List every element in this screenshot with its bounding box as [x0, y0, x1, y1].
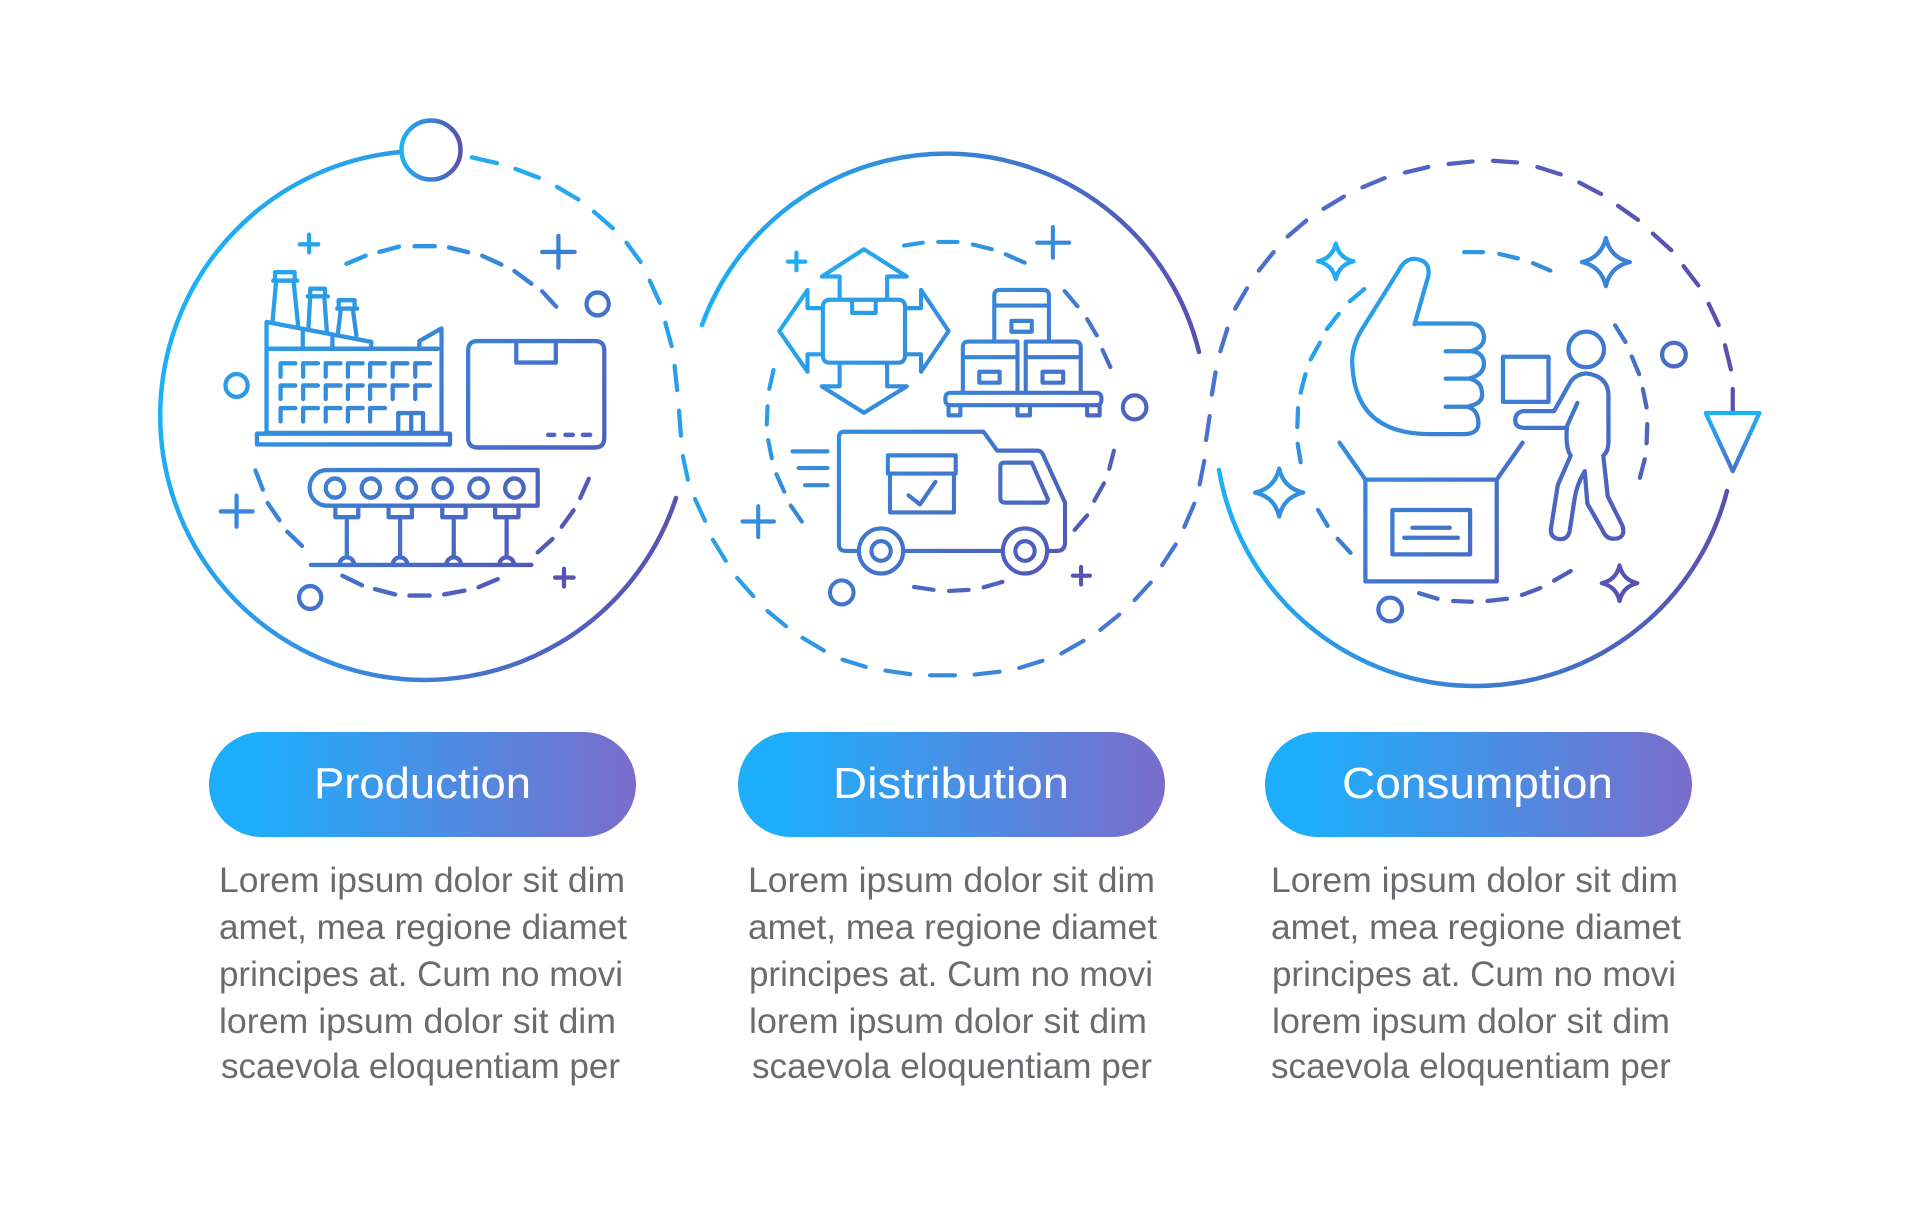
- pill heading: Production: [209, 732, 636, 837]
- start marker circle: [402, 120, 460, 180]
- pill heading: Distribution: [738, 732, 1165, 837]
- icon: thumbs up, open box and customer: [1212, 161, 1759, 621]
- pill heading: Distribution: Distribution: [833, 759, 1069, 808]
- text block: consumption description: scaevola eloquentiam per: [1271, 1047, 1671, 1086]
- icon: distribution box, pallet and van: [683, 227, 1210, 675]
- arrow head: [1706, 413, 1759, 471]
- text block: distribution description: lorem ipsum dolor sit dim: [749, 1002, 1147, 1041]
- conveyor rollers: [326, 478, 524, 498]
- inner dashed ring: consumption: [1297, 252, 1647, 602]
- text block: consumption description: Lorem ipsum dolor sit dim: [1271, 861, 1678, 900]
- decorative sparkles and dots: [1255, 238, 1686, 621]
- icon: factory: [257, 272, 450, 444]
- pill heading: Consumption: Consumption: [1342, 759, 1613, 808]
- panel: distribution circle: [683, 154, 1210, 675]
- text block: distribution description: amet, mea regione diamet: [748, 908, 1157, 947]
- inner dashed ring: distribution: [767, 242, 1114, 591]
- van wheels: [859, 528, 1047, 574]
- text block: distribution description: principes at. Cum no movi: [749, 955, 1153, 994]
- icon: person carrying box: [1503, 332, 1623, 539]
- icon: factory, box and conveyor: [221, 157, 681, 609]
- icon: cardboard box: [468, 341, 604, 447]
- icon: thumbs up: [1352, 259, 1484, 434]
- column: consumption label and text: [1265, 732, 1692, 1086]
- decorative plus signs and dots: [742, 227, 1146, 604]
- text block: consumption description: principes at. Cum no movi: [1272, 955, 1676, 994]
- pill heading: Consumption: [1265, 732, 1692, 837]
- text block: consumption description: [1271, 861, 1681, 1086]
- text block: production description: scaevola eloquentiam per: [221, 1047, 620, 1086]
- solid ring: consumption: [1219, 470, 1727, 686]
- outer dashed arc: production: [472, 157, 681, 436]
- text block: consumption description: lorem ipsum dolor sit dim: [1272, 1002, 1670, 1041]
- icon: boxes on pallet: [945, 290, 1101, 415]
- text block: production description: Lorem ipsum dolor sit dim: [219, 861, 625, 900]
- text block: production description: principes at. Cum no movi: [219, 955, 623, 994]
- outer dashed arc with arrow stem: [1212, 161, 1733, 411]
- panel: production circle: [160, 120, 681, 680]
- text block: production description: lorem ipsum dolor sit dim: [219, 1002, 616, 1041]
- icon: box with four arrows: [779, 249, 949, 413]
- text block: production description: amet, mea regione diamet: [219, 908, 627, 947]
- decorative plus signs and dots: [221, 235, 609, 609]
- solid ring: production: [160, 152, 676, 680]
- icon: delivery van: [792, 432, 1065, 551]
- icon: open box: [1339, 443, 1523, 581]
- text block: distribution description: [748, 861, 1157, 1086]
- column: production label and text: [209, 732, 636, 1086]
- pill heading: Production: Production: [314, 759, 531, 808]
- outer dashed arc: distribution: [683, 416, 1210, 675]
- solid ring: distribution: [702, 154, 1199, 352]
- text block: consumption description: amet, mea regione diamet: [1271, 908, 1681, 947]
- icon: conveyor belt: [310, 470, 538, 565]
- panel: consumption circle: [1212, 161, 1759, 686]
- text block: distribution description: scaevola eloquentiam per: [752, 1047, 1152, 1086]
- column: distribution label and text: [738, 732, 1165, 1086]
- text block: distribution description: Lorem ipsum dolor sit dim: [748, 861, 1155, 900]
- inner dashed ring: production: [255, 246, 589, 596]
- text block: production description: [219, 861, 627, 1086]
